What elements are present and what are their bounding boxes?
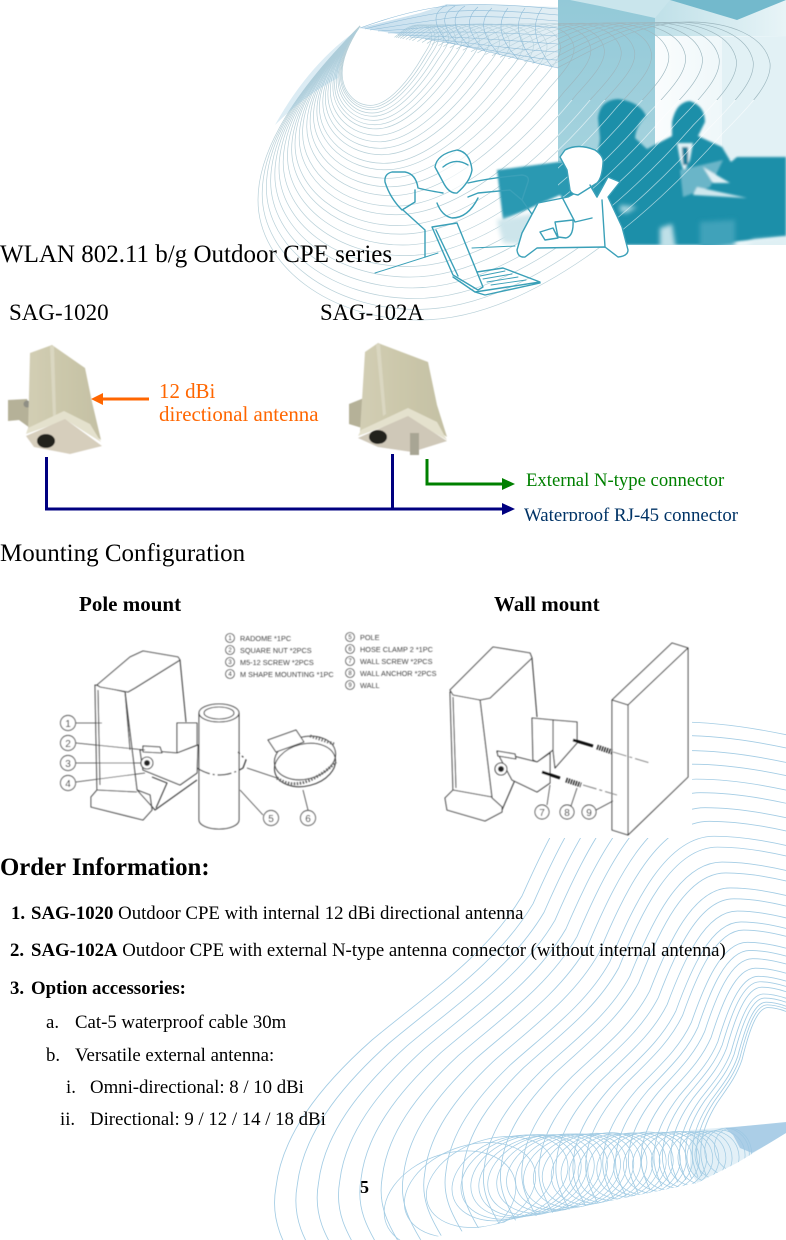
pole [197, 704, 246, 829]
antenna unit body [91, 651, 197, 820]
figure: man with coffee cup [517, 146, 628, 257]
connector lines: waterproof RJ-45 [46, 454, 515, 515]
item i: i. [66, 1077, 76, 1098]
label: waterproof connector: Waterproof RJ-45 connector [524, 505, 739, 526]
item b: b. [46, 1045, 60, 1066]
item a: Cat-5 waterproof cable 30m [75, 1012, 287, 1033]
product photo: SAG-102A [349, 343, 447, 455]
part numbers [535, 805, 596, 819]
heading: pole mount: Pole mount [79, 592, 181, 616]
mounting bracket [140, 723, 198, 808]
model label: SAG-102A: SAG-102A [320, 300, 424, 325]
part numbers [60, 716, 316, 826]
item 2: Outdoor CPE with external N-type antenna connector (without internal antenna) [122, 940, 726, 961]
diagram: wall mount: 9 [586, 808, 592, 819]
diagram: pole mount: 6 [305, 814, 311, 825]
item 2: SAG-102A [31, 940, 118, 961]
parts legend: 1 [228, 636, 232, 642]
screws and anchors [542, 740, 650, 795]
parts legend: WALL SCREW *2PCS [360, 657, 433, 666]
parts legend: 5 [348, 635, 352, 641]
item b: Versatile external antenna: [75, 1045, 274, 1066]
decorative swirl: top line art [258, 4, 770, 320]
line art: two seated figures with laptop [375, 146, 628, 295]
title: WLAN 802.11 b/g Outdoor CPE series [0, 241, 392, 268]
parts legend: WALL ANCHOR *2PCS [360, 669, 437, 678]
diagram: pole mount: 5 [268, 814, 274, 825]
icon: open laptop [432, 223, 540, 295]
parts legend: M SHAPE MOUNTING *1PC [240, 670, 334, 679]
item 3: 3. [10, 978, 24, 999]
item ii: Directional: 9 / 12 / 14 / 18 dBi [90, 1109, 326, 1130]
heading: mounting configuration: Mounting Configuration [0, 540, 246, 567]
mounting diagram white background [40, 625, 692, 838]
leader lines [76, 723, 308, 815]
hose clamp [268, 730, 340, 793]
photo: swirl lines over photo [558, 22, 770, 230]
parts legend: 4 [228, 672, 232, 678]
item 3: Option accessories: [31, 978, 186, 999]
arrow: antenna pointer [91, 393, 149, 405]
diagram: pole mount: 4 [65, 779, 71, 790]
diagram: pole mount [60, 651, 340, 829]
parts legend: 6 [348, 647, 352, 653]
model label: SAG-1020: SAG-1020 [9, 300, 109, 325]
order list [10, 903, 726, 1130]
item i: Omni-directional: 8 / 10 dBi [90, 1077, 304, 1098]
parts legend: M5-12 SCREW *2PCS [240, 658, 314, 667]
diagram: wall mount: 8 [564, 808, 570, 819]
figure: man leaning back [375, 150, 536, 273]
item 2: 2. [10, 940, 24, 961]
item a: a. [46, 1012, 59, 1033]
parts legend: SQUARE NUT *2PCS [240, 646, 312, 655]
photo: seated people and table [497, 99, 786, 245]
parts legend: WALL [360, 681, 380, 690]
parts legend: 2 [228, 648, 232, 654]
wall panel [612, 643, 688, 835]
parts legend: 7 [348, 659, 352, 665]
page number: 5 [360, 1177, 369, 1197]
diagram: wall mount: 7 [539, 808, 545, 819]
parts legend: 8 [348, 671, 352, 677]
leader lines [547, 785, 613, 810]
heading: order information: Order Information: [0, 854, 210, 881]
parts legend: RADOME *1PC [240, 634, 291, 643]
parts legend: POLE [360, 633, 380, 642]
item 1: SAG-1020 [31, 903, 113, 924]
antenna unit [445, 647, 537, 821]
diagram: pole mount: 2 [65, 739, 71, 750]
label: antenna: 12 dBi [159, 379, 215, 403]
item 1: 1. [11, 903, 25, 924]
label: antenna: directional antenna [159, 402, 319, 426]
photo: table reflections [497, 205, 786, 250]
label: external connector: External N-type connector [526, 470, 725, 491]
wall bracket [495, 718, 577, 792]
decorative swirl: bottom line art [274, 722, 786, 1240]
parts legend: 9 [348, 683, 352, 689]
diagram: pole mount: 3 [65, 759, 71, 770]
diagram: pole mount: 1 [65, 719, 71, 730]
banner photo: business meeting [496, 0, 786, 245]
item 1: Outdoor CPE with internal 12 dBi directional antenna [118, 903, 523, 924]
product photo: SAG-1020 [8, 345, 102, 454]
diagram: wall mount [445, 643, 688, 835]
photo: room background [558, 0, 786, 245]
photo: shirt and papers [677, 143, 747, 198]
parts legend [226, 632, 437, 690]
parts legend: 3 [228, 660, 232, 666]
heading: wall mount: Wall mount [494, 592, 600, 616]
connector line: external N-type [427, 459, 515, 490]
parts legend: HOSE CLAMP 2 *1PC [360, 645, 433, 654]
item ii: ii. [60, 1109, 75, 1130]
